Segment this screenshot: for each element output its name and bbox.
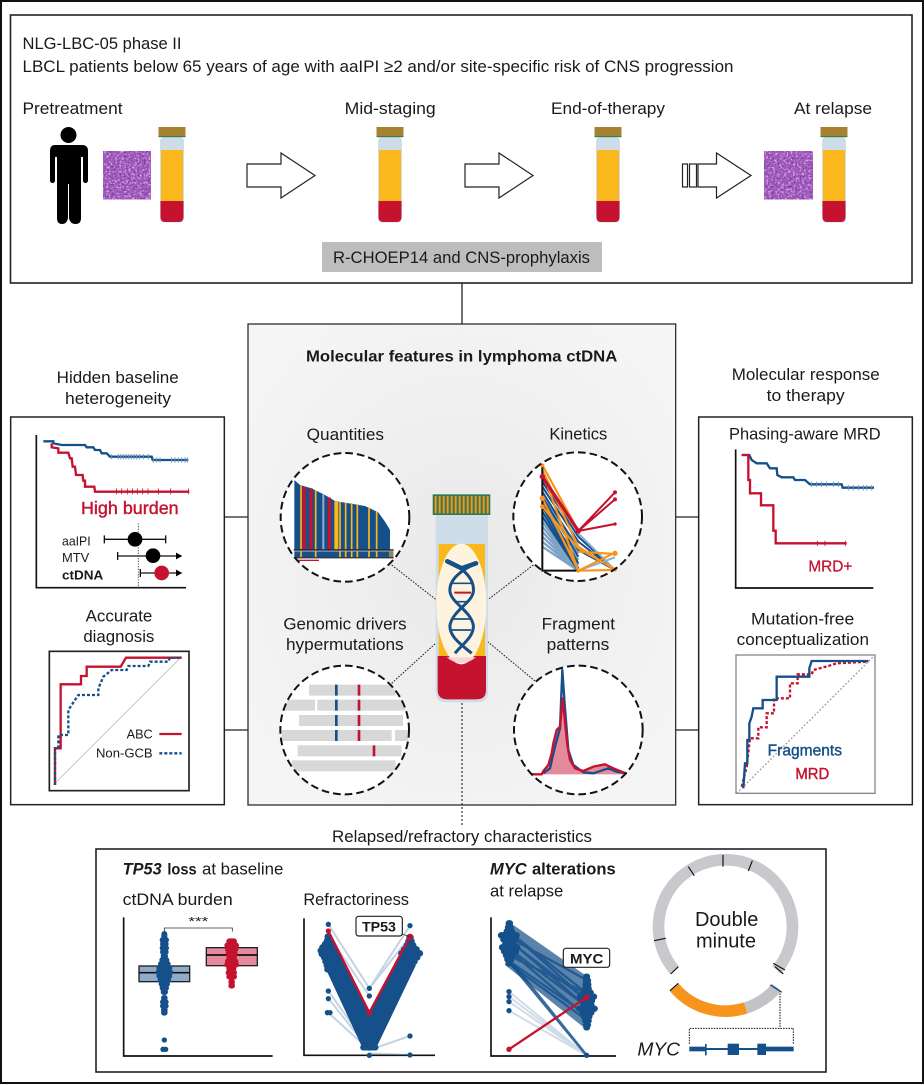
treatment label: R-CHOEP14 and CNS-prophylaxis [333,248,590,267]
curve: high burden [52,443,189,492]
dark lines [542,482,615,571]
curve: fragments [743,661,868,788]
heading: relapsed/refractory characteristics: Relapsed/refractory characteristics [332,827,592,846]
inset ellipse [436,544,486,664]
heading: hidden baseline heterogeneity: heterogeneity [65,389,172,408]
heading: molecular response to therapy [732,365,880,405]
censor ticks [112,454,187,463]
curve: red [532,698,627,774]
label: MYC: MYC [570,950,603,966]
label: fragment patterns: patterns [547,635,609,654]
label: genomic drivers hypermutations: Genomic drivers [283,614,407,633]
curve: low burden [43,441,188,460]
gene: MYC [637,1038,794,1059]
heading: accurate diagnosis: Accurate [86,607,152,626]
label: kinetics: Kinetics [549,424,607,443]
dotted connector to bottom panel [461,703,463,826]
label: double minute: Double [695,909,758,931]
connector: left panel to quantities [224,516,282,518]
connector: study to molecular panel [461,283,463,324]
legend: ABC: ABC [127,726,153,741]
heading: MYC alterations at relapse: alterations [532,860,616,879]
dotted connectors [392,565,535,683]
row: aaIPI: aaIPI [62,533,91,548]
chart: MYC at relapse [491,917,616,1058]
label: mid-staging: Mid-staging [345,99,436,118]
circle: kinetics [513,452,642,581]
area: fragment density [542,698,627,774]
heading: TP53 loss at baseline: TP53 [123,860,162,879]
heading: MYC alterations at relapse: at relapse [490,882,563,901]
connector: fragments to right panel [642,729,698,731]
heading: ctDNA burden: ctDNA burden [123,890,233,909]
arrow [465,153,533,198]
breakpoints [654,855,785,992]
icon: patient [50,127,88,224]
label: quantities: Quantities [307,425,384,444]
icon: blood tube relapse [820,127,848,222]
curve: MRD negative [742,455,874,488]
chart: survival by burden [36,435,189,588]
red lines [542,477,578,531]
heading: accurate diagnosis: diagnosis [83,627,154,646]
heading: TP53 loss at baseline: at baseline [202,860,283,879]
fan [505,925,585,1028]
clusters [321,937,420,1047]
curve: MRD positive [742,455,847,543]
heading: molecular response to therapy: to therapy [767,386,845,405]
heading: hidden baseline heterogeneity: Hidden baseline [57,368,179,387]
panel: hidden baseline heterogeneity [11,417,224,805]
heading: MYC alterations at relapse: MYC [490,860,528,879]
circle: quantities [281,453,409,582]
box: wild type [139,934,190,1052]
label: double minute: minute [696,930,756,952]
heading: MYC alterations at relapse [490,860,616,901]
row: ctDNA: ctDNA [62,567,104,582]
icon: tissue biopsy [103,151,151,200]
heading: hidden baseline heterogeneity [57,368,179,408]
circle: fragment patterns [514,666,643,794]
diagram: double minute [637,855,794,1059]
chart: ROC fragments [736,655,875,793]
label: double minute [695,909,758,952]
curve: Non-GCB [55,658,182,785]
label: TP53 [356,916,410,937]
significance bracket [164,914,232,932]
censor ticks [812,482,872,490]
heading: TP53 loss at baseline: loss [167,862,197,879]
label: genomic drivers hypermutations [283,614,407,654]
chart: ROC diagnosis [49,651,189,791]
chart: survival by MRD [736,449,874,588]
panel: relapsed/refractory [96,849,826,1072]
chart: refractoriness [304,916,435,1058]
MYC highlight [509,997,587,1049]
gene: MYC: MYC [637,1038,681,1059]
heading: accurate diagnosis [83,607,154,646]
central tube with DNA [433,494,490,702]
section: TP53 loss [123,860,435,1058]
upper ring [658,860,792,970]
curve: ABC [55,658,182,785]
heading: mutation-free conceptualization: conceptualization [737,630,869,649]
label: MRD+: MRD+ [808,558,852,575]
label: high burden: High burden [81,498,179,518]
icon: DNA helix [447,561,476,653]
TP53 highlight [328,931,410,1013]
lower ring gray [746,987,777,1008]
row: MTV: MTV [62,550,89,565]
label: TP53: TP53 [362,919,396,935]
study title: NLG-LBC-05 phase II [22,34,182,53]
label: MRD: MRD [795,766,829,783]
heading: molecular response to therapy: Molecular response [732,365,880,384]
section: MYC alterations [490,855,794,1059]
orange lines [542,465,615,571]
box: TP53 loss [206,941,257,986]
heading: mutation-free conceptualization: Mutation-free [751,609,854,628]
lower ring orange [674,987,746,1011]
label: at relapse: At relapse [794,99,872,118]
curve: MRD [742,662,868,787]
label: fragment patterns [542,614,615,654]
connector: left panel to genomic drivers [224,729,282,731]
treatment label [322,242,602,272]
circle: genomic drivers [280,666,412,794]
label: pretreatment: Pretreatment [22,99,123,118]
heading: Molecular features in lymphoma ctDNA [306,349,617,366]
panel: study design [10,15,912,283]
heading: refractoriness: Refractoriness [303,890,409,909]
heading: TP53 loss at baseline [123,860,283,879]
label: end-of-therapy: End-of-therapy [551,99,666,118]
panel: molecular features [248,324,676,805]
cluster: after [579,977,595,1027]
label: genomic drivers hypermutations: hypermutations [286,635,404,654]
icon: tissue biopsy relapse [764,151,813,200]
icon: blood tube pretreatment [158,127,186,222]
cluster: before [501,923,517,963]
icon: blood tube end-of-therapy [594,127,622,222]
arrow [247,153,315,198]
panel: molecular response [699,417,912,805]
arrow: interrupted [682,153,751,198]
chart: ctDNA burden boxplot [124,914,273,1056]
heading: mutation-free conceptualization [737,609,869,649]
significance bracket: *** [188,914,209,928]
study population: LBCL patients below 65 years of age with aaIPI ≥2 and/or site-specific risk of CNS progression [22,57,734,76]
forest plot [62,523,182,588]
icon: blood tube mid-staging [376,127,404,222]
light lines [542,497,578,571]
heading: phasing-aware MRD: Phasing-aware MRD [729,424,881,443]
curve: blue [543,670,627,773]
connector: kinetics to right panel [642,516,698,518]
label: fragments: Fragments [768,743,842,760]
zoom callout [689,993,793,1044]
label: fragment patterns: Fragment [542,614,615,633]
legend: Non-GCB: Non-GCB [96,745,153,760]
censor ticks [117,488,188,494]
label: MYC [563,948,610,967]
